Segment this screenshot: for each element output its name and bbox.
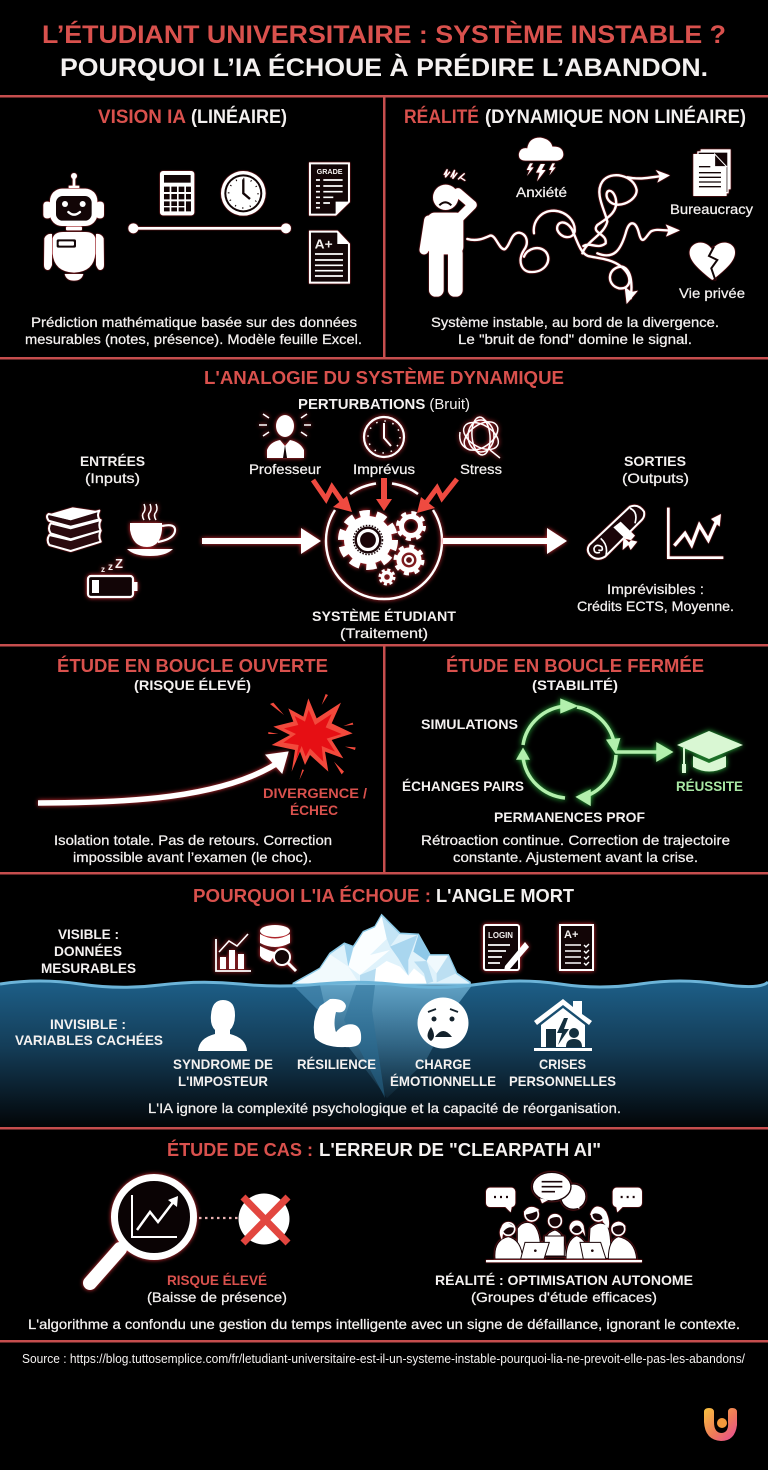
icon: growth chart xyxy=(668,508,723,558)
label: visible: DONNÉES xyxy=(54,943,122,959)
dotted connector xyxy=(199,1217,238,1219)
icon: grade sheet xyxy=(310,163,349,215)
label: divergence: ÉCHEC xyxy=(290,802,338,818)
heading: angle mort: POURQUOI L'IA ÉCHOUE : xyxy=(193,885,431,906)
heading: étude de cas: L'ERREUR DE "CLEARPATH AI" xyxy=(319,1140,601,1160)
label: syndrome de l'imposteur: SYNDROME DE xyxy=(173,1056,273,1072)
panel: boucle fermée xyxy=(402,655,743,865)
icon: A+ sheet: A+ xyxy=(315,237,333,251)
icon: sad face xyxy=(418,998,468,1048)
diagram: feedback loop xyxy=(519,701,670,803)
label: visible xyxy=(41,926,136,976)
ocean xyxy=(0,981,768,1127)
icon: robot xyxy=(43,173,104,281)
iceberg above water xyxy=(293,915,470,984)
arrow: divergence curve xyxy=(38,752,288,803)
icon: study group xyxy=(486,1172,642,1262)
icon: login document: LOGIN xyxy=(488,930,513,940)
text: étude de cas description: L'algorithme a confondu une gestion du temps intelligente avec un signe de défaillance, ignorant le contexte. xyxy=(28,1316,740,1332)
panel: réalité xyxy=(404,106,753,347)
icon: login document xyxy=(484,925,529,971)
label: crises personnelles: CRISES xyxy=(539,1056,586,1072)
label: charge émotionnelle: ÉMOTIONNELLE xyxy=(390,1073,496,1089)
chaotic trajectory arrows xyxy=(467,170,680,304)
icon: A+ checklist xyxy=(560,925,593,970)
label: anxiété: Anxiété xyxy=(516,184,567,200)
heading: réalité: (DYNAMIQUE NON LINÉAIRE) xyxy=(485,106,746,128)
panel: étude de cas xyxy=(28,1139,740,1332)
label: crises personnelles xyxy=(509,1056,616,1089)
panel: système dynamique xyxy=(47,367,734,641)
heading: angle mort: L'ANGLE MORT xyxy=(436,886,574,906)
label: entrées: ENTRÉES xyxy=(80,453,145,469)
label: divergence: DIVERGENCE / xyxy=(263,785,367,801)
label: entrées xyxy=(80,453,145,486)
text: vision IA description: mesurables (notes, présence). Modèle feuille Excel. xyxy=(25,331,362,347)
label: sorties xyxy=(622,453,689,486)
label: résilience: RÉSILIENCE xyxy=(297,1056,376,1072)
label: risque élevé: (Baisse de présence) xyxy=(147,1289,287,1305)
icon: broken house xyxy=(534,999,592,1051)
label: charge émotionnelle xyxy=(390,1056,496,1089)
icon: bar chart xyxy=(216,934,251,971)
label: perturbations: PERTURBATIONS (Bruit) xyxy=(298,397,470,413)
iceberg below water xyxy=(292,984,473,1098)
panel: vision IA xyxy=(25,106,362,347)
heading: boucle fermée: ÉTUDE EN BOUCLE FERMÉE xyxy=(446,655,704,676)
arrows: red lightning xyxy=(313,478,457,513)
icon: grade sheet: GRADE xyxy=(317,169,343,176)
heading: étude de cas: ÉTUDE DE CAS : xyxy=(167,1139,313,1160)
waterline xyxy=(0,981,768,987)
label: réalité optimisation: (Groupes d'étude efficaces) xyxy=(471,1289,657,1305)
text: angle mort description: L'IA ignore la complexité psychologique et la capacité de réorganisation. xyxy=(148,1100,621,1116)
icon: A+ sheet xyxy=(310,232,349,283)
heading: vision IA: VISION IA xyxy=(98,107,186,128)
icon: coffee cup xyxy=(127,504,175,556)
label: système étudiant xyxy=(312,608,456,641)
label: réussite: RÉUSSITE xyxy=(676,778,743,794)
connector line xyxy=(128,223,291,233)
text: outputs description: Crédits ECTS, Moyenne. xyxy=(577,598,734,614)
text: réalité description xyxy=(431,314,719,347)
logo xyxy=(704,1408,737,1441)
icon: stressed person xyxy=(424,169,472,297)
text: outputs description: Imprévisibles : xyxy=(607,581,704,597)
label: risque élevé: RISQUE ÉLEVÉ xyxy=(167,1272,267,1288)
label: sorties: SORTIES xyxy=(624,453,686,469)
heading: boucle ouverte: (RISQUE ÉLEVÉ) xyxy=(134,677,251,693)
text: boucle ouverte description: Isolation totale. Pas de retours. Correction xyxy=(54,832,332,848)
icon: imprévus clock xyxy=(364,417,404,457)
icon: database search xyxy=(260,925,296,971)
text: réalité description: Système instable, au bord de la divergence. xyxy=(431,314,719,330)
label: syndrome de l'imposteur: L'IMPOSTEUR xyxy=(178,1073,268,1089)
text: boucle ouverte description xyxy=(54,832,332,865)
label: professeur: Professeur xyxy=(249,461,321,477)
heading: vision IA xyxy=(98,106,287,128)
icon: explosion xyxy=(268,694,356,780)
icon: storm cloud xyxy=(519,138,563,181)
label: vie privée: Vie privée xyxy=(679,285,745,301)
icon: diploma xyxy=(588,506,644,559)
label: sorties: (Outputs) xyxy=(622,470,689,486)
label: simulations: SIMULATIONS xyxy=(421,716,518,732)
icon: documents xyxy=(693,149,731,196)
text: vision IA description xyxy=(25,314,362,347)
icon: red cross xyxy=(238,1194,290,1244)
title: L’ÉTUDIANT UNIVERSITAIRE : SYSTÈME INSTABLE ? xyxy=(42,20,726,49)
icon: graduation cap xyxy=(677,731,743,773)
text: boucle fermée description: constante. Ajustement avant la crise. xyxy=(453,849,698,865)
label: invisible: INVISIBLE : xyxy=(50,1016,126,1032)
icon: muscle arm xyxy=(314,999,361,1047)
icon: magnifier with chart xyxy=(90,1178,194,1283)
heading: réalité: RÉALITÉ xyxy=(404,106,479,128)
label: système étudiant: (Traitement) xyxy=(340,625,428,641)
text: boucle ouverte description: impossible avant l’examen (le choc). xyxy=(73,849,312,865)
label: divergence xyxy=(263,785,367,818)
label: risque élevé xyxy=(147,1272,287,1305)
label: réalité optimisation xyxy=(435,1272,693,1305)
icon: system circle with gears xyxy=(326,484,442,599)
heading: boucle fermée xyxy=(446,655,704,693)
title: POURQUOI L’IA ÉCHOUE À PRÉDIRE L’ABANDON. xyxy=(60,53,708,82)
arrow: system to outputs xyxy=(443,528,567,554)
label: permanences prof: PERMANENCES PROF xyxy=(494,809,645,825)
icon: clock xyxy=(221,171,266,216)
text: boucle fermée description xyxy=(421,832,730,865)
text: vision IA description: Prédiction mathématique basée sur des données xyxy=(31,314,357,330)
label: charge émotionnelle: CHARGE xyxy=(415,1056,471,1072)
heading: angle mort xyxy=(193,885,574,906)
icon: stress scribble xyxy=(459,416,503,458)
icon: professeur xyxy=(259,414,311,458)
source: Source : https://blog.tuttosemplice.com/fr/letudiant-universitaire-est-il-un-systeme-instable-pourquoi-lia-ne-prevoit-elle-pas-les-abandons/ xyxy=(22,1352,746,1366)
text: réalité description: Le "bruit de fond" domine le signal. xyxy=(458,331,692,347)
icon: broken heart xyxy=(690,243,735,280)
label: invisible: VARIABLES CACHÉES xyxy=(15,1032,163,1048)
label: visible: VISIBLE : xyxy=(58,926,119,942)
label: imprévus: Imprévus xyxy=(353,461,415,477)
icon: low battery: z xyxy=(108,562,113,573)
heading: boucle fermée: (STABILITÉ) xyxy=(532,677,618,693)
arrow: inputs to system xyxy=(202,528,321,554)
label: réalité optimisation: RÉALITÉ : OPTIMISATION AUTONOME xyxy=(435,1272,693,1288)
icon: low battery: Z xyxy=(115,556,123,571)
label: échanges pairs: ÉCHANGES PAIRS xyxy=(402,778,524,794)
heading: étude de cas xyxy=(167,1139,601,1160)
label: crises personnelles: PERSONNELLES xyxy=(509,1073,616,1089)
label: stress: Stress xyxy=(460,461,502,477)
icon: A+ checklist: A+ xyxy=(564,929,578,941)
heading: analogie: L'ANALOGIE DU SYSTÈME DYNAMIQUE xyxy=(204,367,564,388)
heading: boucle ouverte: ÉTUDE EN BOUCLE OUVERTE xyxy=(57,655,328,676)
title xyxy=(42,20,726,82)
icon: calculator xyxy=(160,171,194,215)
panel: angle mort xyxy=(0,885,768,1127)
icon: low battery xyxy=(88,556,138,597)
text: outputs description xyxy=(577,581,734,614)
label: système étudiant: SYSTÈME ÉTUDIANT xyxy=(312,608,456,624)
icon: low battery: z xyxy=(101,565,105,574)
label: entrées: (Inputs) xyxy=(85,470,140,486)
icon: person silhouette xyxy=(198,1000,247,1051)
heading: vision IA: (LINÉAIRE) xyxy=(191,106,287,128)
panel: boucle ouverte xyxy=(38,655,367,865)
label: invisible xyxy=(15,1016,163,1048)
icon: books xyxy=(47,507,101,551)
text: boucle fermée description: Rétroaction continue. Correction de trajectoire xyxy=(421,832,730,848)
label: syndrome de l'imposteur xyxy=(173,1056,273,1089)
label: visible: MESURABLES xyxy=(41,960,136,976)
label: bureaucracy: Bureaucracy xyxy=(670,201,753,217)
heading: boucle ouverte xyxy=(57,655,328,693)
